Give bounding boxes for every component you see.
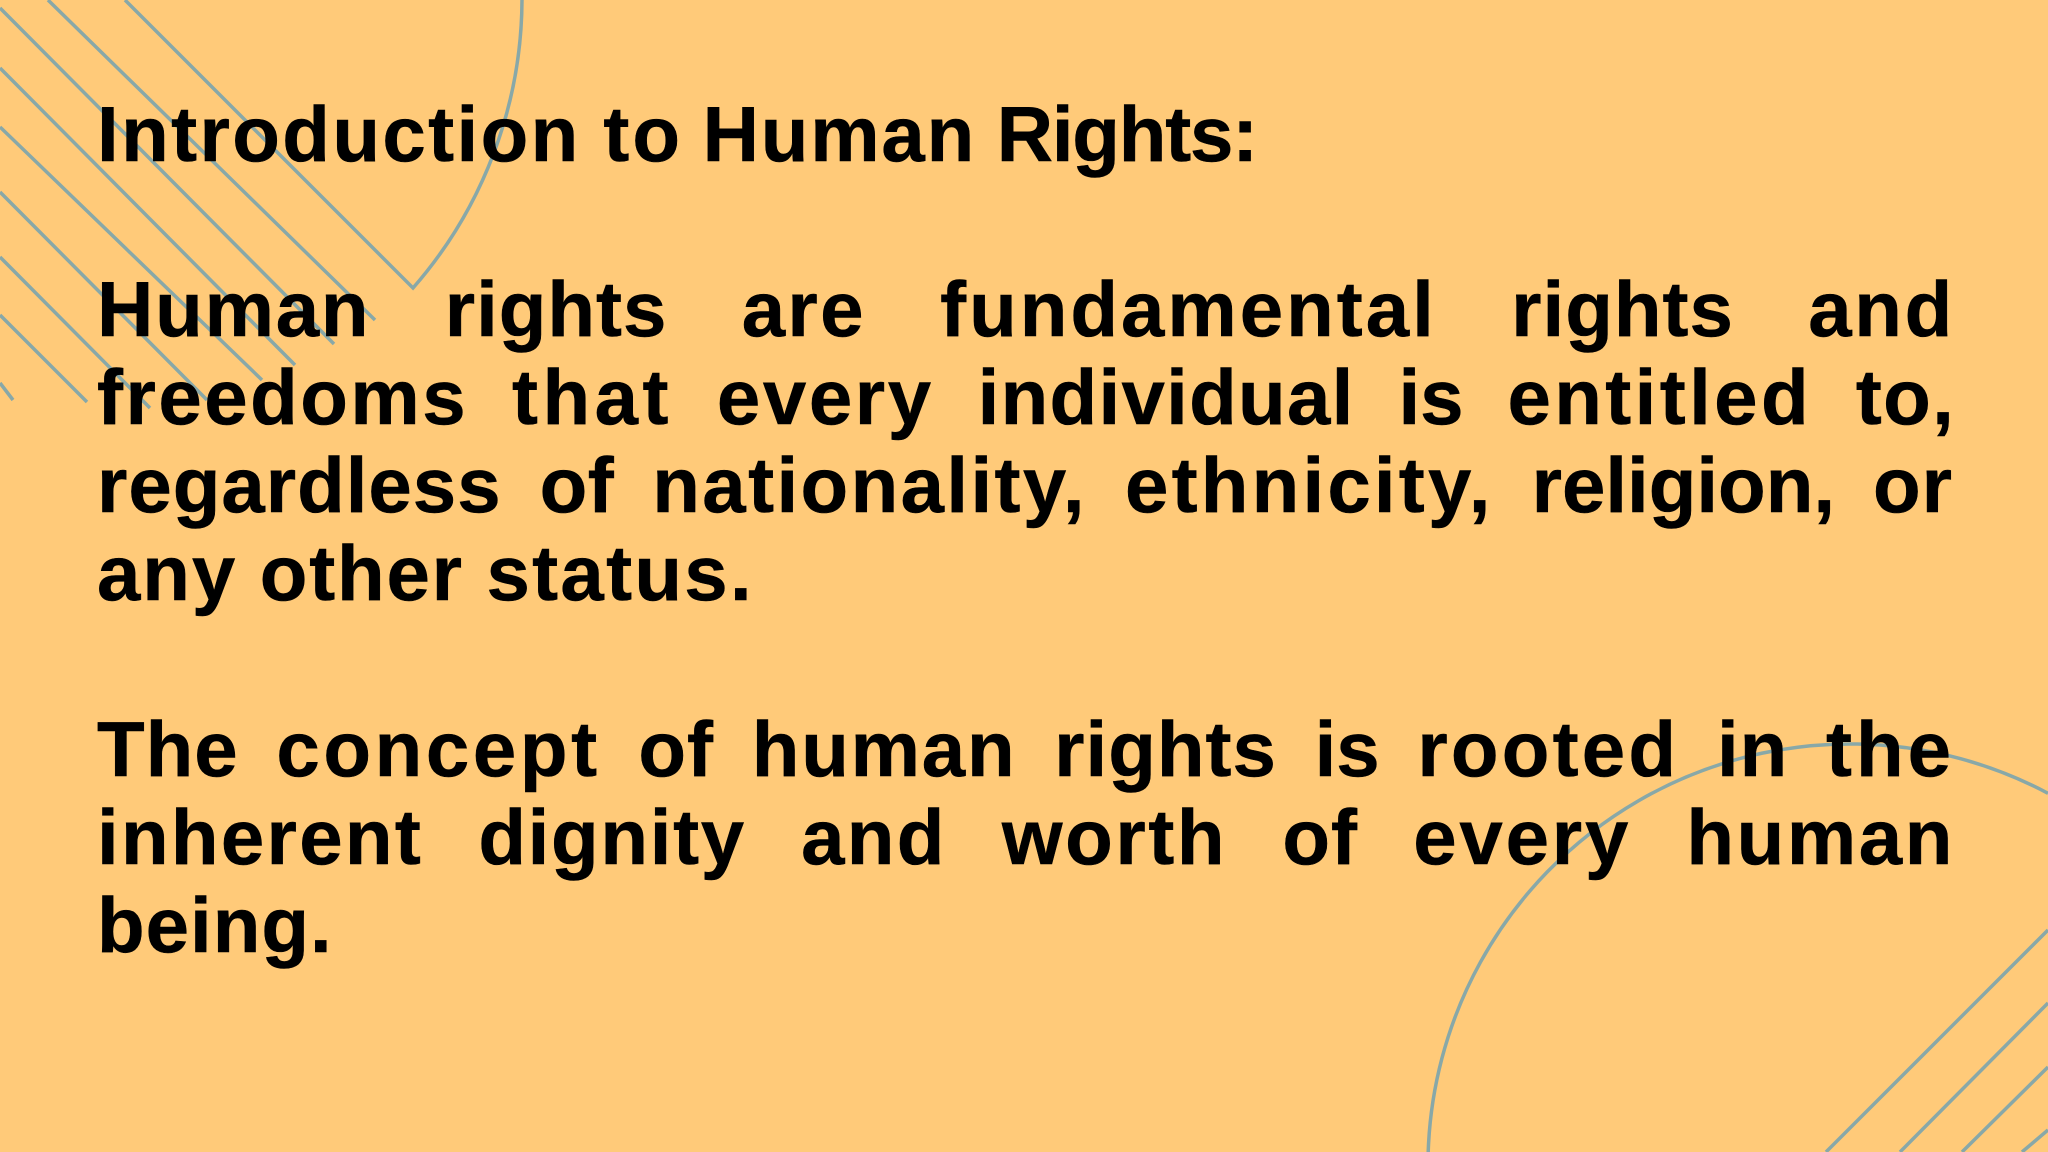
text block: definition of human rights: freedoms that every individual is entitled to, bbox=[97, 353, 1955, 441]
text block: concept of human rights: inherent dignity and worth of every human bbox=[97, 793, 1955, 881]
text block: definition of human rights: Human rights are fundamental rights and bbox=[97, 265, 1955, 353]
text block: definition of human rights: regardless of nationality, ethnicity, religion, or bbox=[97, 441, 1953, 529]
text block: definition of human rights bbox=[97, 265, 1955, 617]
title: Introduction to Human Rights: bbox=[97, 90, 1257, 178]
text block: concept of human rights bbox=[97, 705, 1955, 969]
text block: concept of human rights: The concept of human rights is rooted in the bbox=[97, 705, 1955, 793]
text block: concept of human rights: being. bbox=[97, 881, 333, 969]
text block: definition of human rights: any other status. bbox=[97, 529, 754, 617]
